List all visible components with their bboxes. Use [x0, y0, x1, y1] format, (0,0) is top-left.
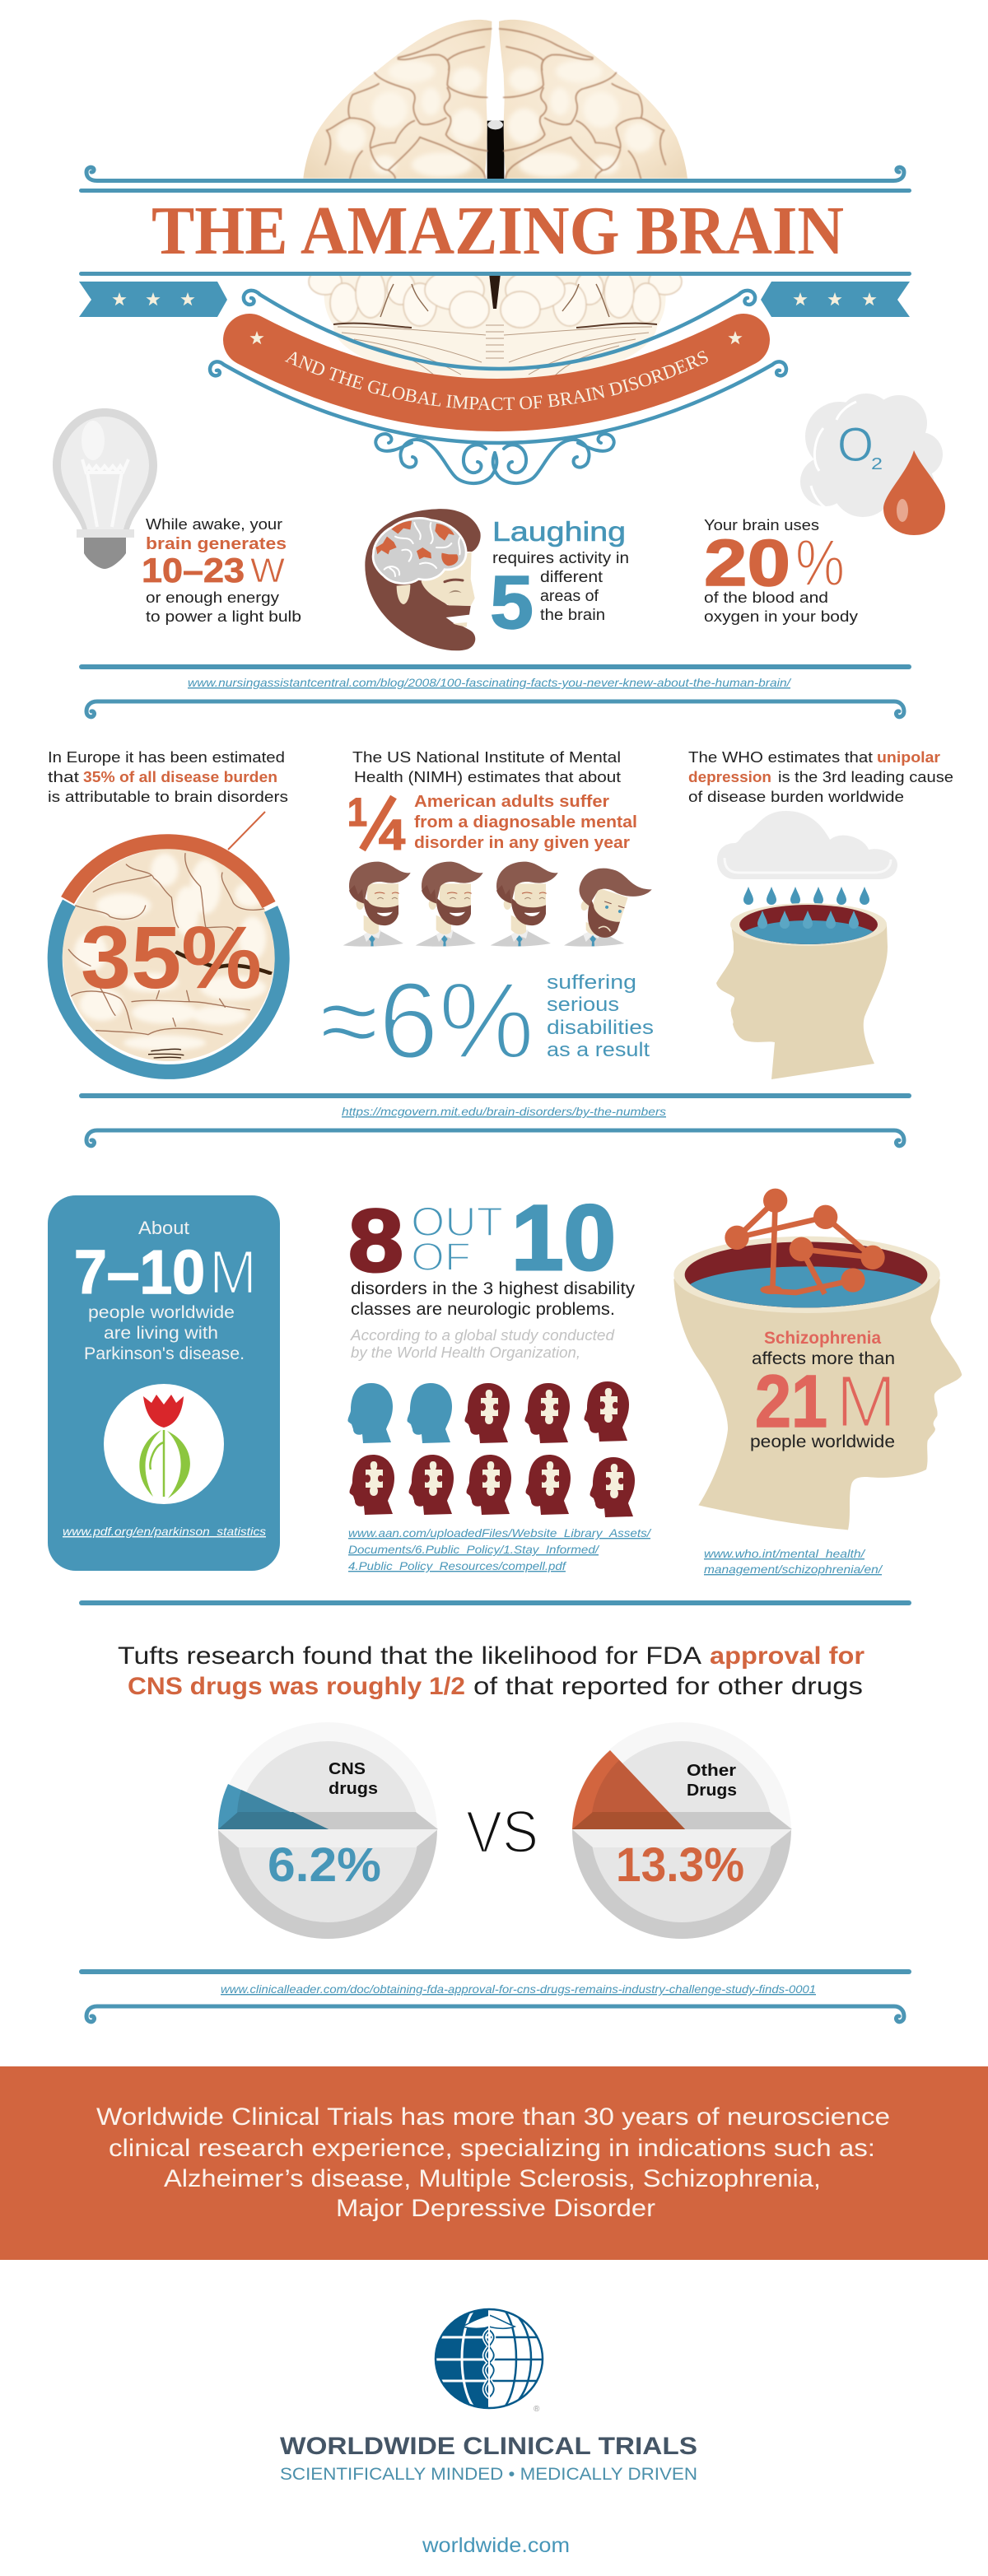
source link 3: Documents/6.Public_Policy/1.Stay_Informed/ — [348, 1543, 600, 1556]
text: schizophrenia statistic: people worldwide — [750, 1432, 895, 1451]
icon: oxygen cloud and blood drop — [800, 394, 945, 535]
panel: parkinson's disease: About — [138, 1218, 189, 1238]
text: WHO unipolar depression: is the 3rd leading cause — [778, 768, 953, 785]
heading: tufts research: CNS drugs was roughly 1/2 — [128, 1673, 465, 1700]
source link 4 — [704, 1547, 883, 1576]
eight out of ten statistic: disorders in the 3 highest disability — [351, 1279, 636, 1298]
panel: worldwide clinical trials experience — [0, 2066, 988, 2260]
logo wordmark: SCIENTIFICALLY MINDED • MEDICALLY DRIVEN — [280, 2465, 697, 2484]
source link 5: www.clinicalleader.com/doc/obtaining-fda-approval-for-cns-drugs-remains-industry-challenge-study-finds-0001 — [221, 1982, 816, 1996]
panel: worldwide clinical trials experience: Alzheimer’s disease, Multiple Sclerosis, Schizophrenia, — [164, 2165, 821, 2192]
eight out of ten statistic: OF — [411, 1236, 471, 1279]
eight out of ten statistic: 8 — [348, 1190, 403, 1290]
text: brain generates watts: W — [250, 551, 285, 589]
text: europe disease burden: is attributable to brain disorders — [48, 788, 288, 805]
one quarter of adults statistic: American adults suffer — [414, 793, 609, 811]
text: NIMH estimate: The US National Institute of Mental — [352, 748, 621, 766]
text: brain generates watts: brain generates — [146, 535, 287, 553]
panel: parkinson's disease: www.pdf.org/en/parkinson_statistics — [63, 1525, 266, 1538]
source link 4: www.who.int/mental_health/ — [704, 1547, 866, 1560]
eight out of ten statistic — [348, 1186, 636, 1361]
eight out of ten statistic: 10 — [511, 1186, 616, 1289]
six percent statistic: disabilities — [547, 1017, 654, 1039]
source link 3: 4.Public_Policy_Resources/compell.pdf — [348, 1559, 567, 1572]
35 percent value: 35% — [81, 907, 262, 1007]
icon: red tulip logo — [139, 1395, 190, 1498]
one quarter of adults statistic: 4 — [379, 812, 405, 859]
one quarter of adults statistic: disorder in any given year — [414, 834, 630, 852]
website address: worldwide.com — [422, 2534, 570, 2557]
source link 1: www.nursingassistantcentral.com/blog/2008/100-fascinating-facts-you-never-knew-about-the-human-brain/ — [188, 676, 792, 689]
text: laughing activates five areas: Laughing — [492, 516, 626, 547]
text: europe disease burden: 35% of all disease burden — [83, 768, 277, 785]
panel: worldwide clinical trials experience: clinical research experience, specializing in indications such as: — [109, 2135, 875, 2162]
eight out of ten statistic: According to a global study conducted — [350, 1327, 615, 1344]
text: laughing activates five areas: the brain — [540, 607, 605, 624]
panel: parkinson's disease: Parkinson's disease. — [84, 1344, 245, 1363]
text: schizophrenia statistic: Schizophrenia — [764, 1329, 881, 1348]
heading: tufts research: Tufts research found that the likelihood for FDA — [118, 1642, 701, 1670]
text: laughing activates five areas: requires activity in — [492, 550, 629, 567]
heading: tufts research: of that reported for other drugs — [473, 1673, 863, 1700]
panel: parkinson's disease: are living with — [104, 1324, 218, 1343]
source link 3: www.aan.com/uploadedFiles/Website_Library_Assets/ — [348, 1526, 652, 1540]
icon: oxygen cloud and blood drop: O — [837, 418, 874, 472]
text: brain generates watts: 10–23 — [142, 551, 245, 589]
icon: light bulb — [53, 408, 157, 569]
eight out of ten statistic: by the World Health Organization, — [351, 1344, 580, 1361]
icon: rain cloud over open head — [716, 811, 897, 1079]
one quarter of adults statistic: from a diagnosable mental — [414, 813, 637, 831]
pie chart: CNS drugs: 6.2% — [268, 1838, 381, 1892]
text: WHO unipolar depression: of disease burden worldwide — [688, 788, 904, 805]
six percent statistic — [319, 960, 654, 1081]
white title band — [79, 193, 911, 272]
panel: worldwide clinical trials experience: Worldwide Clinical Trials has more than 30 years of neuroscience — [96, 2103, 890, 2131]
panel: parkinson's disease: M — [209, 1237, 257, 1307]
one quarter of adults statistic: 1 — [347, 791, 367, 835]
icon: four men, three happy and one sad — [343, 861, 654, 948]
icon: laughing head with brain — [365, 509, 481, 650]
pie chart: other drugs: 13.3% — [616, 1838, 744, 1892]
logo wordmark: WORLDWIDE CLINICAL TRIALS — [280, 2433, 697, 2460]
eight out of ten statistic: OUT — [411, 1199, 503, 1245]
text: brain generates watts — [142, 516, 301, 625]
panel: parkinson's disease — [48, 1195, 280, 1571]
text: europe disease burden — [48, 748, 288, 805]
text: brain generates watts: to power a light bulb — [146, 608, 301, 625]
ornament swirl — [375, 434, 614, 483]
one quarter of adults statistic — [347, 791, 637, 859]
text: WHO unipolar depression: The WHO estimates that — [688, 748, 873, 766]
panel: parkinson's disease: people worldwide — [88, 1303, 235, 1322]
text: schizophrenia statistic — [750, 1329, 897, 1451]
text: europe disease burden: In Europe it has been estimated — [48, 748, 285, 766]
text: twenty percent of oxygen: oxygen in your body — [704, 608, 858, 625]
text: schizophrenia statistic: 21 — [755, 1361, 827, 1443]
eight out of ten statistic: classes are neurologic problems. — [351, 1300, 615, 1319]
text: brain generates watts: or enough energy — [146, 589, 279, 606]
lower scroll arc — [210, 361, 786, 443]
icon: schizophrenia head with molecule — [673, 1189, 962, 1530]
icon grid: ten heads, eight with puzzle pieces — [348, 1381, 635, 1517]
source link 2: https://mcgovern.mit.edu/brain-disorders/by-the-numbers — [342, 1105, 666, 1118]
six percent statistic: ≈6% — [319, 960, 534, 1081]
text: NIMH estimate — [352, 748, 621, 785]
logo wordmark — [280, 2433, 697, 2484]
chart: 35 percent ring with brain — [55, 812, 282, 1072]
logo: globe with caduceus — [435, 2309, 543, 2414]
text: twenty percent of oxygen: % — [795, 526, 845, 599]
text: schizophrenia statistic: M — [836, 1361, 897, 1443]
heading: tufts research: approval for — [710, 1642, 864, 1670]
logo: globe with caduceus: ® — [534, 2405, 540, 2414]
source link 4: management/schizophrenia/en/ — [704, 1563, 883, 1576]
banner subtitle text: AND THE GLOBAL IMPACT OF BRAIN DISORDERS — [285, 351, 708, 410]
pie chart: other drugs: Other — [687, 1762, 736, 1780]
six percent statistic: suffering — [547, 971, 636, 994]
text: WHO unipolar depression: depression — [688, 768, 771, 785]
text: schizophrenia statistic: affects more than — [752, 1349, 895, 1368]
pie chart: other drugs: Drugs — [687, 1782, 737, 1800]
text: twenty percent of oxygen — [704, 517, 858, 625]
left star ribbon — [79, 282, 227, 317]
text: europe disease burden: that — [48, 768, 79, 785]
six percent statistic: serious — [547, 994, 619, 1016]
VS label: VS — [466, 1800, 538, 1866]
heading: tufts research — [118, 1642, 864, 1700]
pie chart: CNS drugs: drugs — [329, 1780, 378, 1798]
six percent statistic: as a result — [547, 1039, 650, 1061]
right star ribbon — [761, 282, 910, 317]
brain illustration: upper part — [303, 20, 687, 179]
text: WHO unipolar depression — [688, 748, 953, 805]
text: WHO unipolar depression: unipolar — [877, 748, 940, 766]
pie chart: CNS drugs: CNS — [329, 1760, 366, 1778]
text: laughing activates five areas — [490, 516, 629, 645]
text: brain generates watts: While awake, your — [146, 516, 282, 533]
subtitle banner — [223, 314, 770, 431]
text: laughing activates five areas: 5 — [490, 561, 534, 645]
text: twenty percent of oxygen: Your brain uses — [704, 517, 819, 533]
pie chart: other drugs — [572, 1741, 792, 1939]
panel: parkinson's disease: 7–10 — [74, 1237, 205, 1307]
text: laughing activates five areas: different — [540, 569, 604, 586]
upper scroll arc — [244, 291, 755, 369]
text: twenty percent of oxygen: of the blood and — [704, 589, 828, 606]
panel: worldwide clinical trials experience: Major Depressive Disorder — [336, 2195, 655, 2222]
pie chart: CNS drugs — [217, 1741, 438, 1939]
icon: oxygen cloud and blood drop: 2 — [871, 455, 883, 473]
brain illustration: lower part and cerebellum — [309, 268, 682, 380]
source link 3 — [348, 1526, 652, 1572]
text: NIMH estimate: Health (NIMH) estimates that about — [354, 768, 621, 785]
title: THE AMAZING BRAIN — [151, 193, 844, 269]
curled top rule — [86, 167, 904, 181]
text: laughing activates five areas: areas of — [540, 588, 599, 605]
text: twenty percent of oxygen: 20 — [704, 526, 790, 599]
